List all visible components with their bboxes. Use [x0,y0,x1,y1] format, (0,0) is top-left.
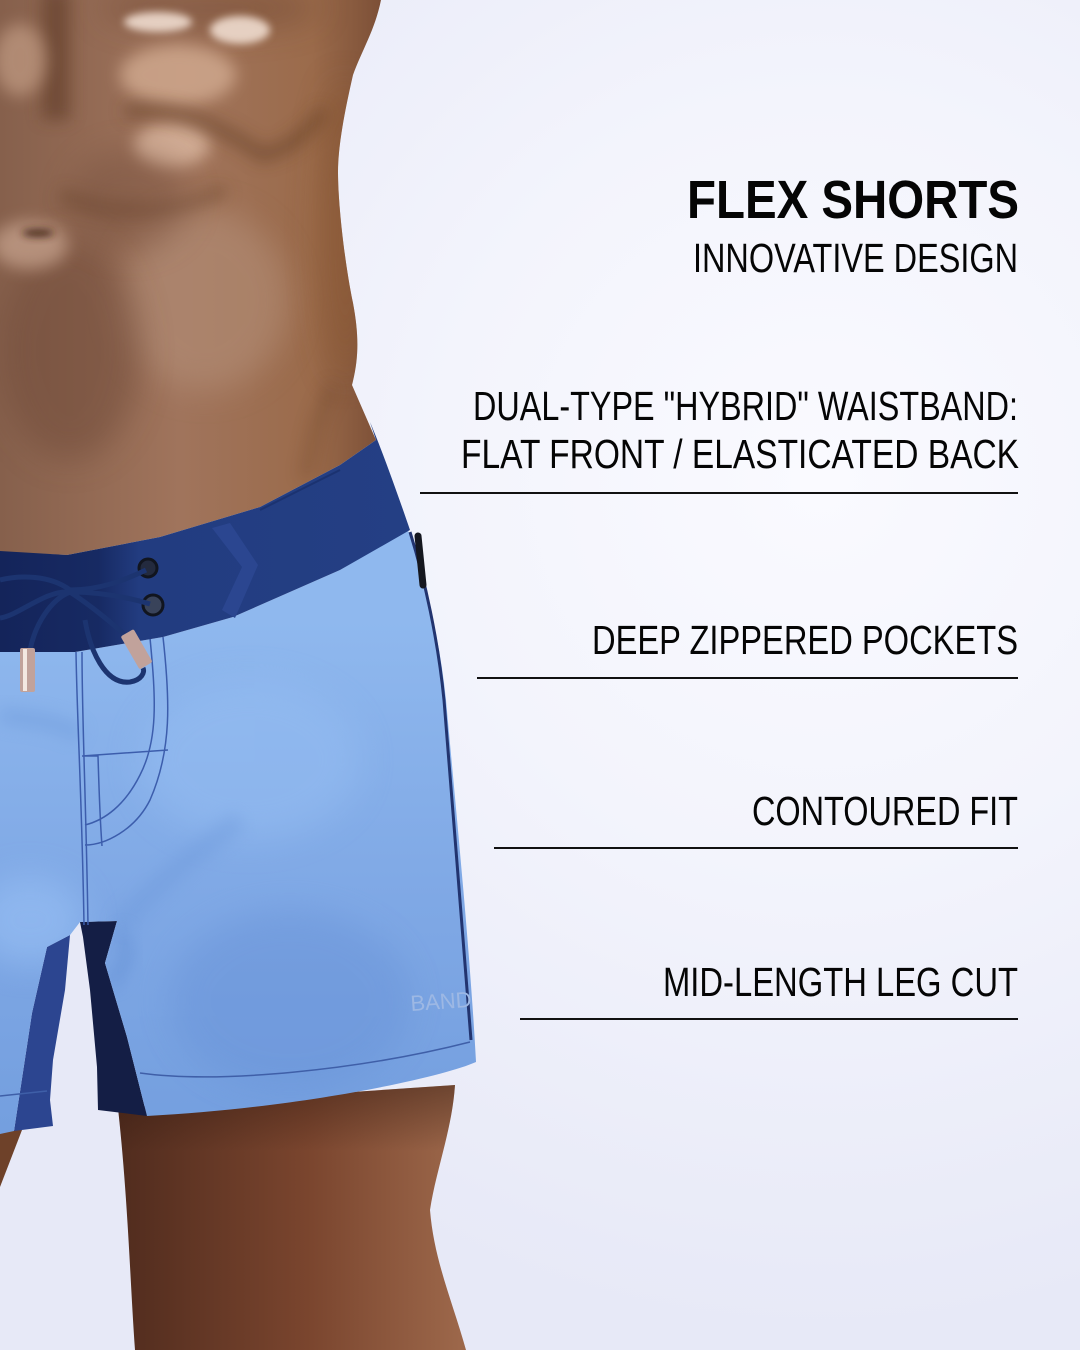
left crotch panel [14,935,70,1131]
waistband chevron [212,523,258,618]
heading: Flex Shorts [687,170,1019,281]
side zipper [418,536,423,585]
shorts body [0,520,480,1140]
eyelets [139,559,163,615]
hem stitching [0,1042,470,1096]
left leg [0,1130,22,1187]
model photo: torso, legs and shorts [0,0,480,1350]
right leg [118,1085,466,1350]
side seam [410,532,471,1040]
feature: contoured fit: CONTOURED FIT [752,788,1018,834]
waistband [0,422,410,652]
drawstring tips [20,629,153,692]
torso [0,0,400,560]
right crotch panel [80,921,147,1116]
feature: hybrid waistband [420,383,1019,494]
shorts logo: BAND [410,987,472,1016]
drawstring [0,570,150,682]
heading: Flex Shorts: FLEX SHORTS [687,170,1019,230]
fly stitching [76,637,168,925]
